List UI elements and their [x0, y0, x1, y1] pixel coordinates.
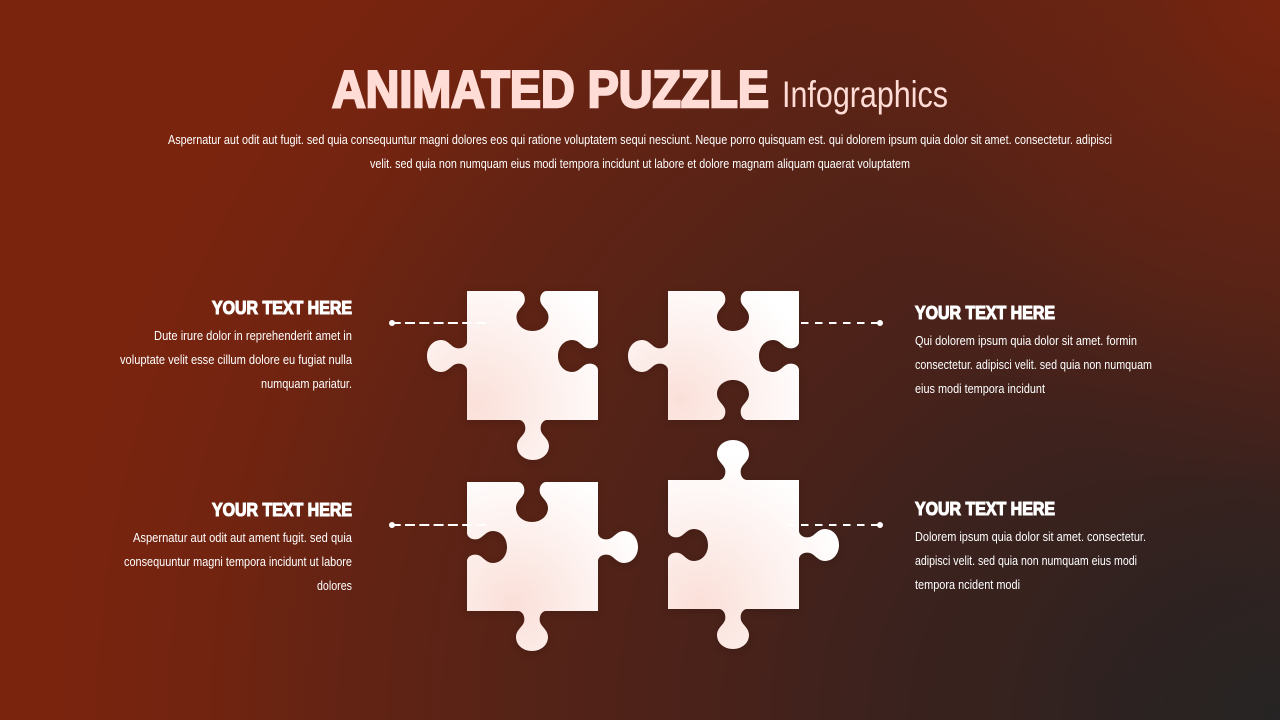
intro text block [168, 132, 1112, 171]
text block: top right: eius modi tempora incidunt [915, 381, 1045, 396]
text block: bottom left: Aspernatur aut odit aut ament fugit. sed quia [133, 530, 353, 545]
intro text block: Aspernatur aut odit aut fugit. sed quia consequuntur magni dolores eos qui ratione voluptatem sequi nesciunt. Neque porro quisquam est. qui dolorem ipsum quia dolor sit amet. consectetur. adipisci [168, 132, 1112, 147]
text block: bottom left [124, 500, 353, 593]
text block: top right: YOUR TEXT HERE [915, 303, 1055, 323]
text block: top right: Qui dolorem ipsum quia dolor sit amet. formin [915, 333, 1137, 348]
text block: top left: YOUR TEXT HERE [212, 298, 352, 318]
puzzle piece: top left [427, 291, 598, 460]
text block: top left: voluptate velit esse cillum dolore eu fugiat nulla [120, 352, 353, 367]
connector: bottom left [389, 522, 486, 528]
text block: bottom right: tempora ncident modi [915, 577, 1020, 592]
text block: top right: consectetur. adipisci velit. sed quia non numquam [915, 357, 1152, 372]
text block: bottom right: YOUR TEXT HERE [915, 499, 1055, 519]
puzzle piece: bottom right [668, 440, 839, 649]
text block: bottom left: dolores [317, 578, 352, 593]
puzzle piece: top right [628, 291, 799, 420]
text block: top left: numquam pariatur. [261, 376, 352, 391]
intro text block: velit. sed quia non numquam eius modi tempora incidunt ut labore et dolore magnam aliquam quaerat voluptatem [370, 156, 910, 171]
puzzle piece: bottom left [467, 482, 638, 651]
text block: bottom right [915, 499, 1146, 592]
text block: top left [120, 298, 353, 391]
connector: bottom right [787, 522, 883, 528]
text block: bottom left: YOUR TEXT HERE [212, 500, 352, 520]
text block: bottom right: Dolorem ipsum quia dolor sit amet. consectetur. [915, 529, 1146, 544]
connector: top right [801, 320, 883, 326]
title: main: ANIMATED PUZZLE [332, 61, 769, 119]
connector: top left [389, 320, 486, 326]
text block: top right [915, 303, 1152, 396]
text block: bottom right: adipisci velit. sed quia non numquam eius modi [915, 553, 1137, 568]
title: subtitle: Infographics [782, 74, 948, 115]
title [332, 61, 948, 119]
text block: bottom left: consequuntur magni tempora incidunt ut labore [124, 554, 352, 569]
text block: top left: Dute irure dolor in reprehenderit amet in [154, 328, 352, 343]
